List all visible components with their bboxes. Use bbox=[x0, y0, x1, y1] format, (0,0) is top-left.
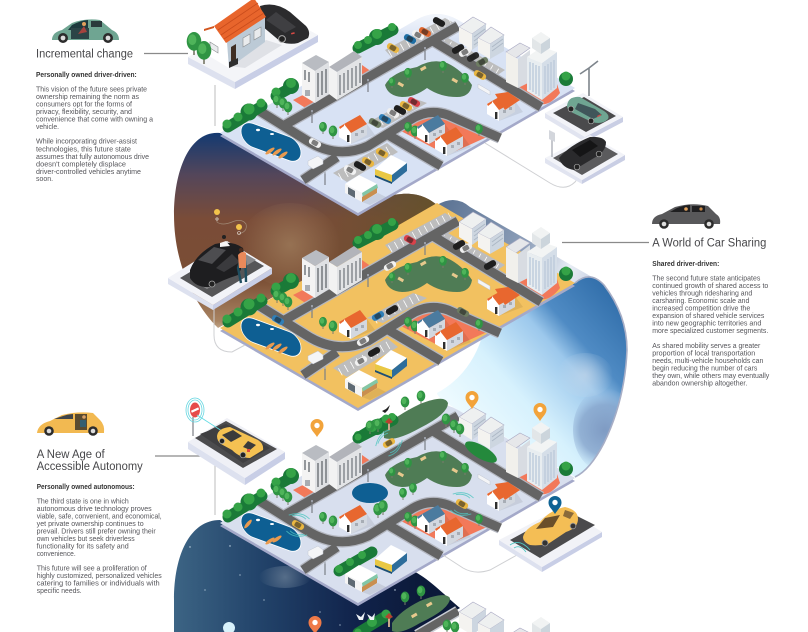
city: new age of accessible autonomy bbox=[220, 390, 575, 606]
text block: Personally owned driver-driven: assumes that fully autonomous drive bbox=[36, 154, 149, 161]
icon: green car with driver bbox=[52, 19, 119, 43]
text block: Shared driver-driven: abandon ownership altogether. bbox=[652, 380, 747, 387]
text block: Shared driver-driven: more specialized customer segments. bbox=[652, 328, 768, 335]
text block: Personally owned autonomous: highly customized, personalized vehicles bbox=[37, 573, 162, 580]
ribbon: night sky below third city bbox=[174, 520, 460, 632]
text block: Personally owned driver-driven: privacy, flexibility, security, and bbox=[36, 109, 132, 116]
text block: Personally owned autonomous: viable, safe, convenient, and economical, bbox=[37, 514, 162, 521]
text block: Shared driver-driven: As shared mobility serves a greater bbox=[652, 343, 761, 350]
text block: Personally owned driver-driven: soon. bbox=[36, 176, 53, 183]
text block: Personally owned autonomous: This future will see a proliferation of bbox=[37, 566, 147, 573]
tile: autonomous sedan with blue pin bbox=[499, 496, 602, 572]
text block: Personally owned autonomous: convenience. bbox=[37, 551, 76, 558]
ribbon: dusk sky between first and second city bbox=[174, 133, 437, 345]
text block: Shared driver-driven: carsharing. Economic scale and bbox=[652, 298, 749, 305]
text block: Shared driver-driven: The second future state anticipates bbox=[652, 276, 761, 283]
text block: Personally owned driver-driven: consumers opt for the forms of bbox=[36, 102, 132, 109]
tile: black car and sign bbox=[545, 130, 625, 184]
text block: Personally owned driver-driven: technologies, this future state bbox=[36, 146, 131, 153]
heading: A World of Car Sharing: A World of Car Sharing bbox=[652, 238, 766, 250]
text block: Shared driver-driven: increased competition drive the bbox=[652, 306, 750, 313]
text block: Shared driver-driven: proportion of local transportation bbox=[652, 351, 755, 358]
text block: Shared driver-driven: vehicles through ridesharing and bbox=[652, 291, 752, 298]
text block: Personally owned driver-driven: vehicle. bbox=[36, 124, 59, 131]
text block: Shared driver-driven: Shared driver-driven: bbox=[652, 261, 719, 268]
heading: A New Age of Accessible Autonomy bbox=[37, 449, 143, 473]
text block: Personally owned driver-driven: ownership remaining the norm as bbox=[36, 94, 139, 101]
city: world of car sharing bbox=[220, 203, 575, 411]
heading: Incremental change: Incremental change bbox=[36, 48, 133, 60]
heading: A New Age of Accessible Autonomy: Accessible Autonomy bbox=[37, 461, 143, 473]
icon: grey shared car bbox=[652, 204, 720, 229]
text block: Personally owned autonomous: prevail. Drivers still prefer owning their bbox=[37, 529, 156, 536]
text block: Shared driver-driven: they own, while others may eventually bbox=[652, 373, 770, 380]
text block: Personally owned driver-driven bbox=[36, 72, 153, 183]
text block: Shared driver-driven: begin reducing the number of cars bbox=[652, 365, 758, 372]
connector lines bbox=[144, 54, 649, 572]
text block: Shared driver-driven: expansion of shared vehicle services bbox=[652, 313, 765, 320]
text block: Personally owned autonomous: functionality for its safety and bbox=[37, 544, 129, 551]
icon: dark bird above third city bbox=[382, 405, 390, 413]
text block: Personally owned driver-driven: While incorporating driver-assist bbox=[36, 139, 137, 146]
text block: Personally owned autonomous: Personally owned autonomous: bbox=[37, 484, 135, 491]
text block: Personally owned autonomous: own vehicles but seek driverless bbox=[37, 536, 135, 543]
tile: green car and lamp post bbox=[545, 61, 623, 142]
tile: shared black car with people bbox=[168, 209, 272, 310]
tile: house and black car bbox=[187, 0, 318, 89]
icon: yellow autonomous car bbox=[37, 412, 104, 436]
text block: Shared driver-driven: needs, multi-vehicle households can bbox=[652, 358, 763, 365]
text block: Personally owned driver-driven: doesn't completely displace bbox=[36, 161, 126, 168]
icon: night map pin bbox=[308, 616, 322, 632]
text block: Personally owned driver-driven: This vision of the future sees private bbox=[36, 87, 147, 94]
text block: Personally owned autonomous: autonomous drive technology proves bbox=[37, 506, 152, 513]
text block: Personally owned driver-driven: driver-controlled vehicles anytime bbox=[36, 169, 141, 176]
text block: Personally owned autonomous: The third state is one in which bbox=[37, 499, 129, 506]
icon: moon bbox=[223, 622, 235, 632]
text block: Personally owned autonomous: catering to families or individuals with bbox=[37, 581, 160, 588]
text block: Shared driver-driven bbox=[652, 261, 770, 387]
text block: Personally owned driver-driven: Personally owned driver-driven: bbox=[36, 72, 137, 79]
text block: Shared driver-driven: into new geographic territories and bbox=[652, 321, 761, 328]
text block: Personally owned autonomous: yet private ownership continues to bbox=[37, 521, 144, 528]
icon: night birds bbox=[356, 612, 375, 620]
ribbon: daylight sky between second and third city bbox=[437, 200, 637, 477]
text block: Personally owned autonomous bbox=[37, 484, 162, 595]
city: next state, cropped at the page bottom bbox=[354, 586, 550, 632]
tile: autonomous yellow car and stop sign bbox=[186, 398, 285, 485]
text block: Personally owned autonomous: specific needs. bbox=[37, 588, 82, 595]
map pins over third city bbox=[310, 391, 546, 437]
text block: Personally owned driver-driven: convenience that come with owning a bbox=[36, 117, 153, 124]
heading: A New Age of Accessible Autonomy: A New Age of bbox=[37, 449, 105, 461]
city: incremental change bbox=[220, 14, 575, 216]
text block: Shared driver-driven: continued growth of shared access to bbox=[652, 283, 768, 290]
